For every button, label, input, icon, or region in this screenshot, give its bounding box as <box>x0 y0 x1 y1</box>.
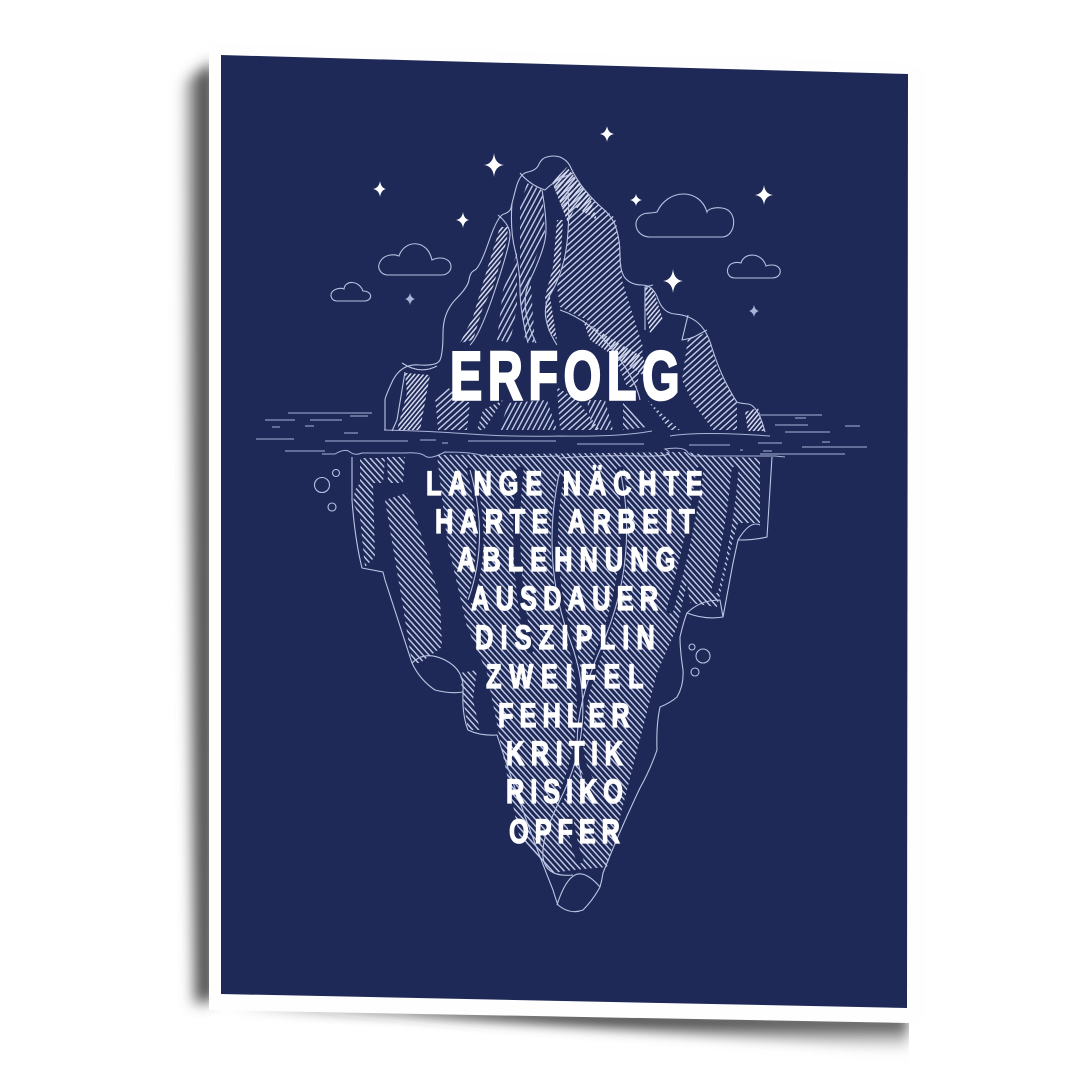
below water hatching <box>353 452 760 873</box>
word list below the waterline: RISIKO <box>506 773 623 811</box>
cloud: small left <box>331 282 371 301</box>
word list below the waterline: AUSDAUER <box>471 580 658 618</box>
word list below the waterline: OPFER <box>509 813 620 851</box>
above water hatching <box>397 167 765 431</box>
word list below the waterline: FEHLER <box>498 697 630 735</box>
word list below the waterline: DISZIPLIN <box>475 619 655 657</box>
word list below the waterline <box>426 465 703 851</box>
paper shadow: left <box>180 62 214 1004</box>
stars <box>373 126 773 317</box>
clouds <box>331 194 780 301</box>
cloud: left <box>379 244 451 275</box>
word list below the waterline: ZWEIFEL <box>486 658 644 696</box>
word list below the waterline: ABLEHNUNG <box>457 541 675 579</box>
word list below the waterline: HARTE ARBEIT <box>435 503 695 541</box>
word list below the waterline: KRITIK <box>506 735 623 773</box>
above water outline and contours <box>385 156 765 432</box>
paper sheet <box>209 43 925 1023</box>
below water outline and contours <box>352 457 772 912</box>
cloud: upper right <box>636 194 734 237</box>
bubbles <box>314 470 710 676</box>
navy poster panel <box>221 55 908 1008</box>
iceberg illustration <box>256 156 867 912</box>
water surface lines <box>256 413 867 458</box>
paper shadow: bottom <box>250 1011 909 1052</box>
cloud: right <box>727 255 780 278</box>
word list below the waterline: LANGE NÄCHTE <box>426 465 703 503</box>
title: ERFOLG <box>450 337 680 415</box>
